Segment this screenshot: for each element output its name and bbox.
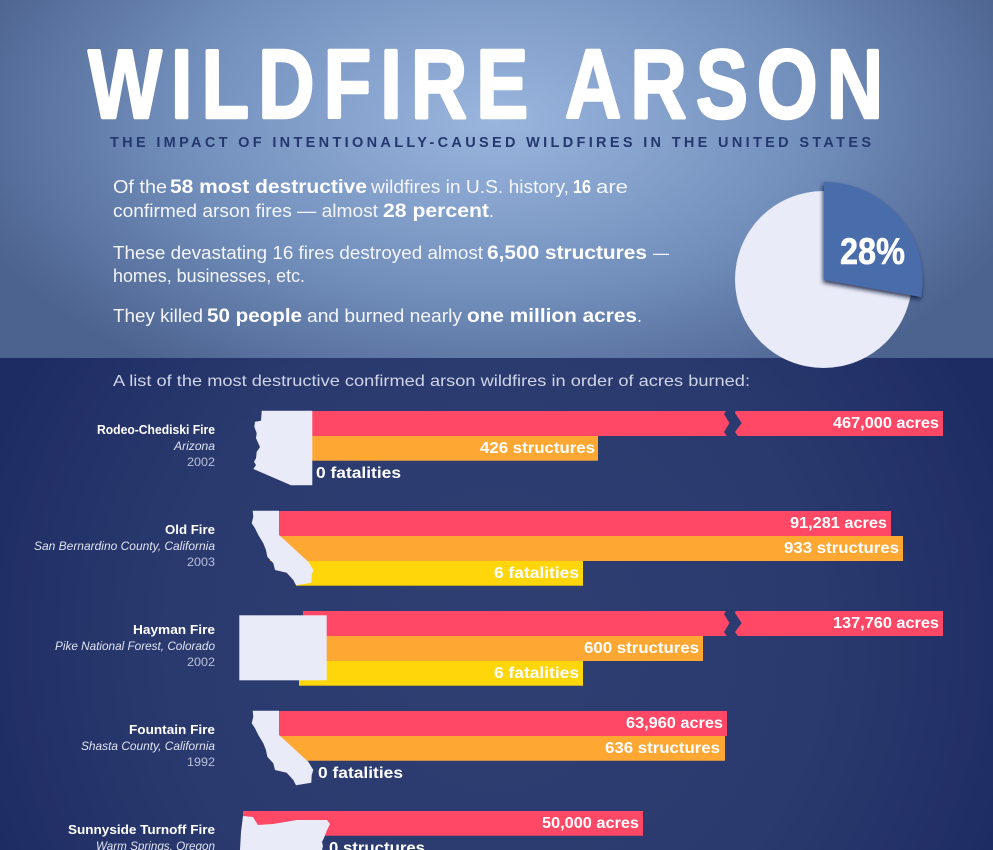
pie base bbox=[735, 191, 912, 368]
location: San Bernardino County, California bbox=[34, 539, 215, 553]
intro text block bbox=[113, 176, 669, 327]
fatalities label: 0 fatalities bbox=[316, 465, 401, 482]
intro text block: 50 people bbox=[207, 305, 302, 327]
intro text block: . bbox=[489, 201, 494, 221]
intro text block: 28 percent bbox=[383, 200, 490, 222]
row: Old Fire bbox=[34, 511, 903, 586]
acres bar bbox=[243, 811, 643, 836]
year: 2002 bbox=[187, 455, 215, 469]
fatalities label: 6 fatalities bbox=[494, 565, 579, 582]
structures bar bbox=[310, 636, 703, 661]
intro text block: homes, businesses, etc. bbox=[113, 266, 305, 286]
acres label: 50,000 acres bbox=[542, 815, 639, 832]
location: Pike National Forest, Colorado bbox=[55, 639, 215, 653]
fatalities label: 0 fatalities bbox=[318, 765, 403, 782]
intro text block: 16 bbox=[573, 176, 591, 197]
intro text block: These devastating 16 fires destroyed almost bbox=[113, 243, 483, 263]
fire name: Hayman Fire bbox=[133, 622, 215, 637]
intro text block: . bbox=[637, 306, 642, 326]
intro text block: confirmed arson fires — almost bbox=[113, 201, 378, 221]
fire name: Old Fire bbox=[165, 522, 215, 537]
year: 2002 bbox=[187, 655, 215, 669]
intro text block: one million acres bbox=[467, 305, 637, 327]
pie slice bbox=[824, 182, 922, 297]
pie label: 28% bbox=[840, 231, 905, 272]
header panel bbox=[0, 0, 993, 358]
structures label: 600 structures bbox=[584, 640, 699, 657]
location: Shasta County, California bbox=[81, 739, 215, 753]
icon: Oregon bbox=[240, 816, 330, 850]
icon: Arizona bbox=[253, 411, 312, 485]
icon: California bbox=[252, 511, 313, 585]
structures bar bbox=[270, 736, 725, 761]
structures label: 636 structures bbox=[605, 740, 720, 757]
intro text block: wildfires in U.S. history, bbox=[370, 177, 569, 197]
acres bar bbox=[300, 411, 943, 436]
structures bar bbox=[300, 436, 598, 461]
structures bar bbox=[270, 536, 903, 561]
fatalities bar bbox=[299, 661, 583, 686]
acres bar bbox=[270, 711, 727, 736]
acres label: 91,281 acres bbox=[790, 515, 887, 532]
fatalities bar bbox=[296, 561, 583, 586]
row: Fountain Fire bbox=[81, 711, 727, 785]
acres label: 137,760 acres bbox=[833, 615, 939, 632]
fire name: Rodeo-Chediski Fire bbox=[97, 422, 215, 437]
intro text block: are bbox=[596, 177, 628, 197]
intro text block: Of the bbox=[113, 177, 167, 197]
intro text block: — bbox=[653, 243, 669, 263]
intro text block: and burned nearly bbox=[307, 306, 462, 326]
acres bar bbox=[303, 611, 943, 636]
acres label: 467,000 acres bbox=[833, 415, 939, 432]
icon: Colorado bbox=[239, 615, 327, 680]
pie chart: 28 percent bbox=[735, 182, 922, 368]
year: 2003 bbox=[187, 555, 215, 569]
fire name: Fountain Fire bbox=[129, 722, 215, 737]
list intro: A list of the most destructive confirmed arson wildfires in order of acres burned: bbox=[113, 373, 750, 390]
row: Hayman Fire bbox=[55, 611, 943, 686]
structures label: 933 structures bbox=[784, 540, 899, 557]
structures label: 426 structures bbox=[480, 440, 595, 457]
acres label: 63,960 acres bbox=[626, 715, 723, 732]
location: Arizona bbox=[173, 439, 215, 453]
intro text block: 6,500 structures bbox=[487, 242, 647, 264]
row: Sunnyside Turnoff Fire bbox=[68, 811, 643, 850]
year: 1992 bbox=[187, 755, 215, 769]
acres bar bbox=[270, 511, 891, 536]
fire name: Sunnyside Turnoff Fire bbox=[68, 822, 215, 837]
intro text block: 58 most destructive bbox=[170, 176, 367, 198]
subtitle: THE IMPACT OF INTENTIONALLY-CAUSED WILDFIRES IN THE UNITED STATES bbox=[110, 135, 871, 151]
intro text block: They killed bbox=[113, 306, 203, 326]
icon: California bbox=[252, 711, 313, 785]
fatalities label: 6 fatalities bbox=[494, 665, 579, 682]
row: Rodeo-Chediski Fire bbox=[97, 411, 943, 485]
